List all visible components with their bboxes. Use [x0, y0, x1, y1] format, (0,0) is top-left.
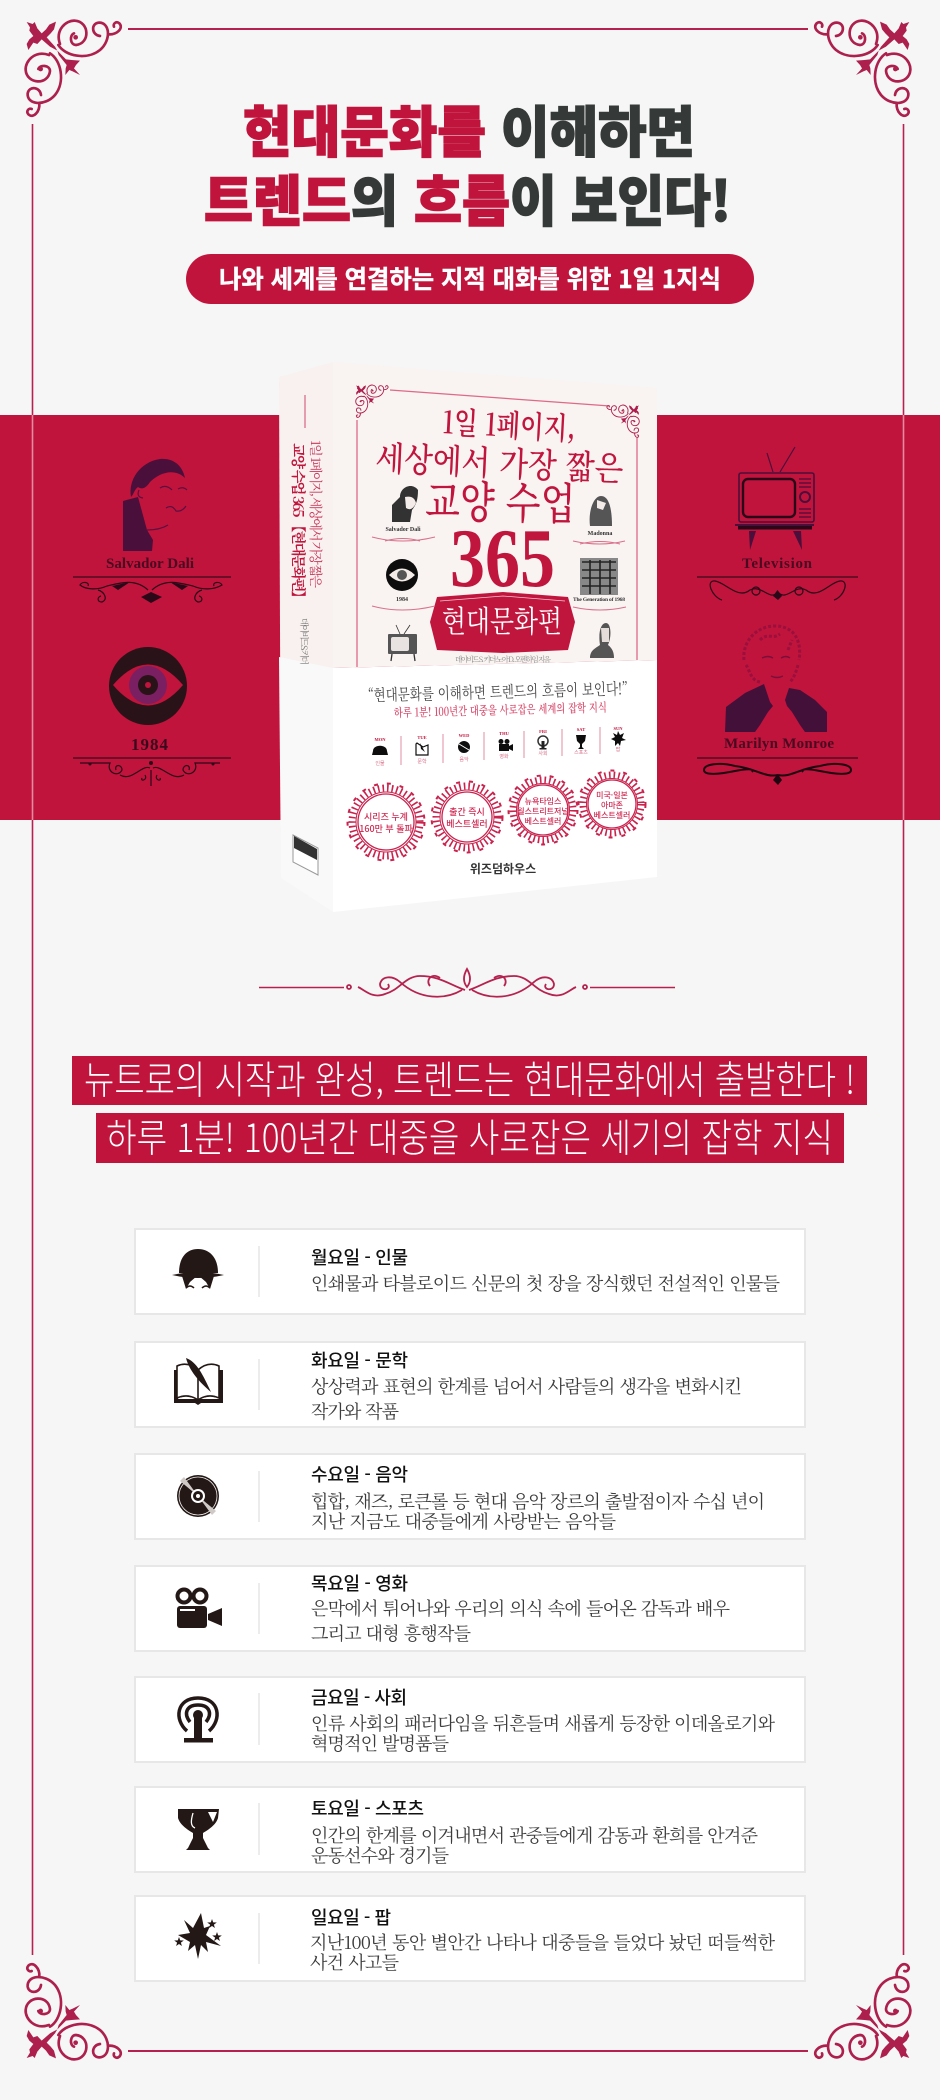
belt weekday icons: 영화	[499, 753, 509, 760]
red band behind the book	[0, 415, 940, 820]
headline: 현대문화를	[243, 88, 486, 168]
card: Wednesday: 힙합, 재즈, 로큰롤 등 현대 음악 장르의 출발점이자 수십 년이	[311, 1488, 765, 1514]
cover title: 365	[450, 512, 555, 605]
cover title	[375, 397, 625, 605]
icon: starburst	[174, 1913, 222, 1959]
card: Saturday: 운동선수와 경기들	[311, 1842, 449, 1868]
right art: television	[697, 447, 858, 600]
card: Tuesday: 상상력과 표현의 한계를 넘어서 사람들의 생각을 변화시킨	[311, 1373, 742, 1399]
belt weekday icons: WED	[459, 733, 470, 738]
card: Tuesday	[135, 1342, 805, 1427]
book: box set	[279, 362, 657, 912]
belt weekday icons	[372, 726, 626, 767]
belt quote: 하루 1분! 100년간 대중을 사로잡은 세계의 잡학 지식	[394, 698, 607, 721]
icon: bowler hat	[172, 1249, 224, 1289]
belt seals: 출간 즉시	[449, 805, 485, 818]
belt seals: 월스트리트저널	[517, 806, 569, 817]
cover subtitle plaque: 현대문화편	[442, 597, 562, 641]
book spine: 교양 수업 365 【현대문화편】	[288, 443, 309, 605]
card: Sunday: 지난100년 동안 별안간 나타나 대중들을 들었다 놨던 떠들썩한	[310, 1929, 776, 1955]
icon: book and quill	[174, 1358, 223, 1405]
card: Monday: 월요일 - 인물	[311, 1244, 408, 1270]
belt seals: 아마존	[601, 800, 623, 811]
belt weekday icons: 스포츠	[574, 749, 588, 756]
right art: Marilyn Monroe	[697, 626, 858, 785]
right art: television: Television	[742, 556, 813, 572]
card: Saturday	[135, 1787, 805, 1872]
belt quote: “현대문화를 이해하면 트렌드의 흐름이 보인다!”	[368, 676, 628, 706]
cover title: 세상에서 가장 짧은	[375, 431, 625, 491]
belt weekday icons: SUN	[613, 726, 623, 731]
left art: 1984 eye: 1984	[131, 735, 169, 754]
cover illustrations: Madonna	[588, 531, 612, 537]
left art: 1984 eye	[73, 647, 231, 786]
belt seals	[348, 770, 646, 860]
headline	[204, 88, 731, 237]
belt seals: 시리즈 누계	[364, 810, 408, 823]
cover subtitle plaque	[430, 592, 575, 653]
cover frame	[356, 385, 639, 667]
card: Tuesday: 화요일 - 문학	[311, 1347, 408, 1373]
subtitle pill	[186, 254, 754, 304]
belt weekday icons: 문학	[417, 758, 427, 765]
belt weekday icons: MON	[374, 737, 386, 742]
card: Saturday: 인간의 한계를 이겨내면서 관중들에게 감동과 환희를 안겨준	[311, 1822, 758, 1848]
card: Sunday: 일요일 - 팝	[311, 1904, 391, 1930]
book spine: 1일 1페이지, 세상에서 가장 짧은	[307, 440, 326, 588]
cover illustrations: Salvador Dali	[385, 527, 421, 533]
icon: movie camera	[177, 1590, 222, 1628]
icon: trophy	[178, 1809, 219, 1850]
headline: 의	[351, 157, 398, 237]
belt seals: 베스트셀러	[525, 816, 561, 827]
cover illustrations	[372, 486, 626, 665]
belt quote	[368, 676, 628, 721]
icon: radio antenna	[179, 1698, 217, 1742]
left art: Salvador Dali	[73, 459, 231, 603]
card: Friday: 혁명적인 발명품들	[311, 1730, 449, 1756]
card: Thursday: 은막에서 튀어나와 우리의 의식 속에 들어온 감독과 배우	[311, 1595, 730, 1621]
icon: compact disc	[177, 1475, 219, 1517]
publisher name: 위즈덤하우스	[470, 860, 536, 877]
card: Monday	[135, 1229, 805, 1314]
belt weekday icons: THU	[499, 731, 510, 736]
cover title: 교양 수업	[425, 466, 576, 533]
card: Wednesday: 수요일 - 음악	[311, 1461, 408, 1487]
belt weekday icons: SAT	[577, 727, 585, 732]
belt weekday icons: FRI	[539, 729, 547, 734]
belt seals: 베스트셀러	[594, 810, 630, 821]
belt seals: 160만 부 돌파	[359, 822, 413, 835]
headline: 흐름	[414, 157, 510, 237]
belt weekday icons: 인물	[375, 760, 385, 767]
book spine	[279, 362, 333, 912]
cover illustrations: 데이비드 S. 키더·노아 D. 오펜하임 지음	[455, 654, 552, 665]
cover illustrations: 1984	[396, 597, 408, 603]
card: Friday: 인류 사회의 패러다임을 뒤흔들며 새롭게 등장한 이데올로기와	[311, 1710, 776, 1736]
card: Sunday: 사건 사고들	[310, 1949, 399, 1975]
headline: 트렌드	[204, 157, 351, 237]
card: Saturday: 토요일 - 스포츠	[311, 1795, 424, 1821]
belt seals: 뉴욕타임스	[525, 796, 561, 807]
card: Thursday	[135, 1566, 805, 1651]
card: Sunday	[135, 1896, 805, 1981]
cover title: 1일 1페이지,	[442, 397, 577, 449]
banner: line 2: 하루 1분! 100년간 대중을 사로잡은 세기의 잡학 지식	[106, 1108, 833, 1164]
headline: 이 보인다!	[510, 157, 731, 237]
card: Monday: 인쇄물과 타블로이드 신문의 첫 장을 장식했던 전설적인 인물들	[311, 1270, 780, 1296]
belt seals: 베스트셀러	[446, 817, 488, 830]
card: Tuesday: 작가와 작품	[311, 1398, 399, 1424]
book front cover	[333, 362, 657, 668]
card: Thursday: 그리고 대형 흥행작들	[311, 1620, 471, 1646]
belt weekday icons: 사회	[538, 750, 548, 757]
card: Wednesday: 지난 지금도 대중들에게 사랑받는 음악들	[311, 1508, 616, 1534]
ornamental divider	[259, 969, 675, 997]
card: Wednesday	[135, 1454, 805, 1539]
belt weekday icons: TUE	[417, 735, 427, 740]
right art: Marilyn Monroe: Marilyn Monroe	[724, 736, 834, 752]
book spine: 데이비드 S. 키더	[298, 618, 311, 665]
card: Friday: 금요일 - 사회	[311, 1684, 407, 1710]
headline: 이해하면	[501, 88, 695, 168]
belt seals: 미국·일본	[596, 790, 628, 801]
subtitle pill: 나와 세계를 연결하는 지적 대화를 위한 1일 1지식	[219, 260, 721, 296]
belt weekday icons: 음악	[459, 756, 469, 763]
left art: Salvador Dali: Salvador Dali	[106, 556, 194, 572]
belt weekday icons: 팝	[616, 746, 621, 753]
cover illustrations: The Generation of 1968	[573, 597, 625, 603]
book belt	[333, 660, 657, 912]
card: Friday	[135, 1677, 805, 1762]
card: Thursday: 목요일 - 영화	[311, 1570, 408, 1596]
